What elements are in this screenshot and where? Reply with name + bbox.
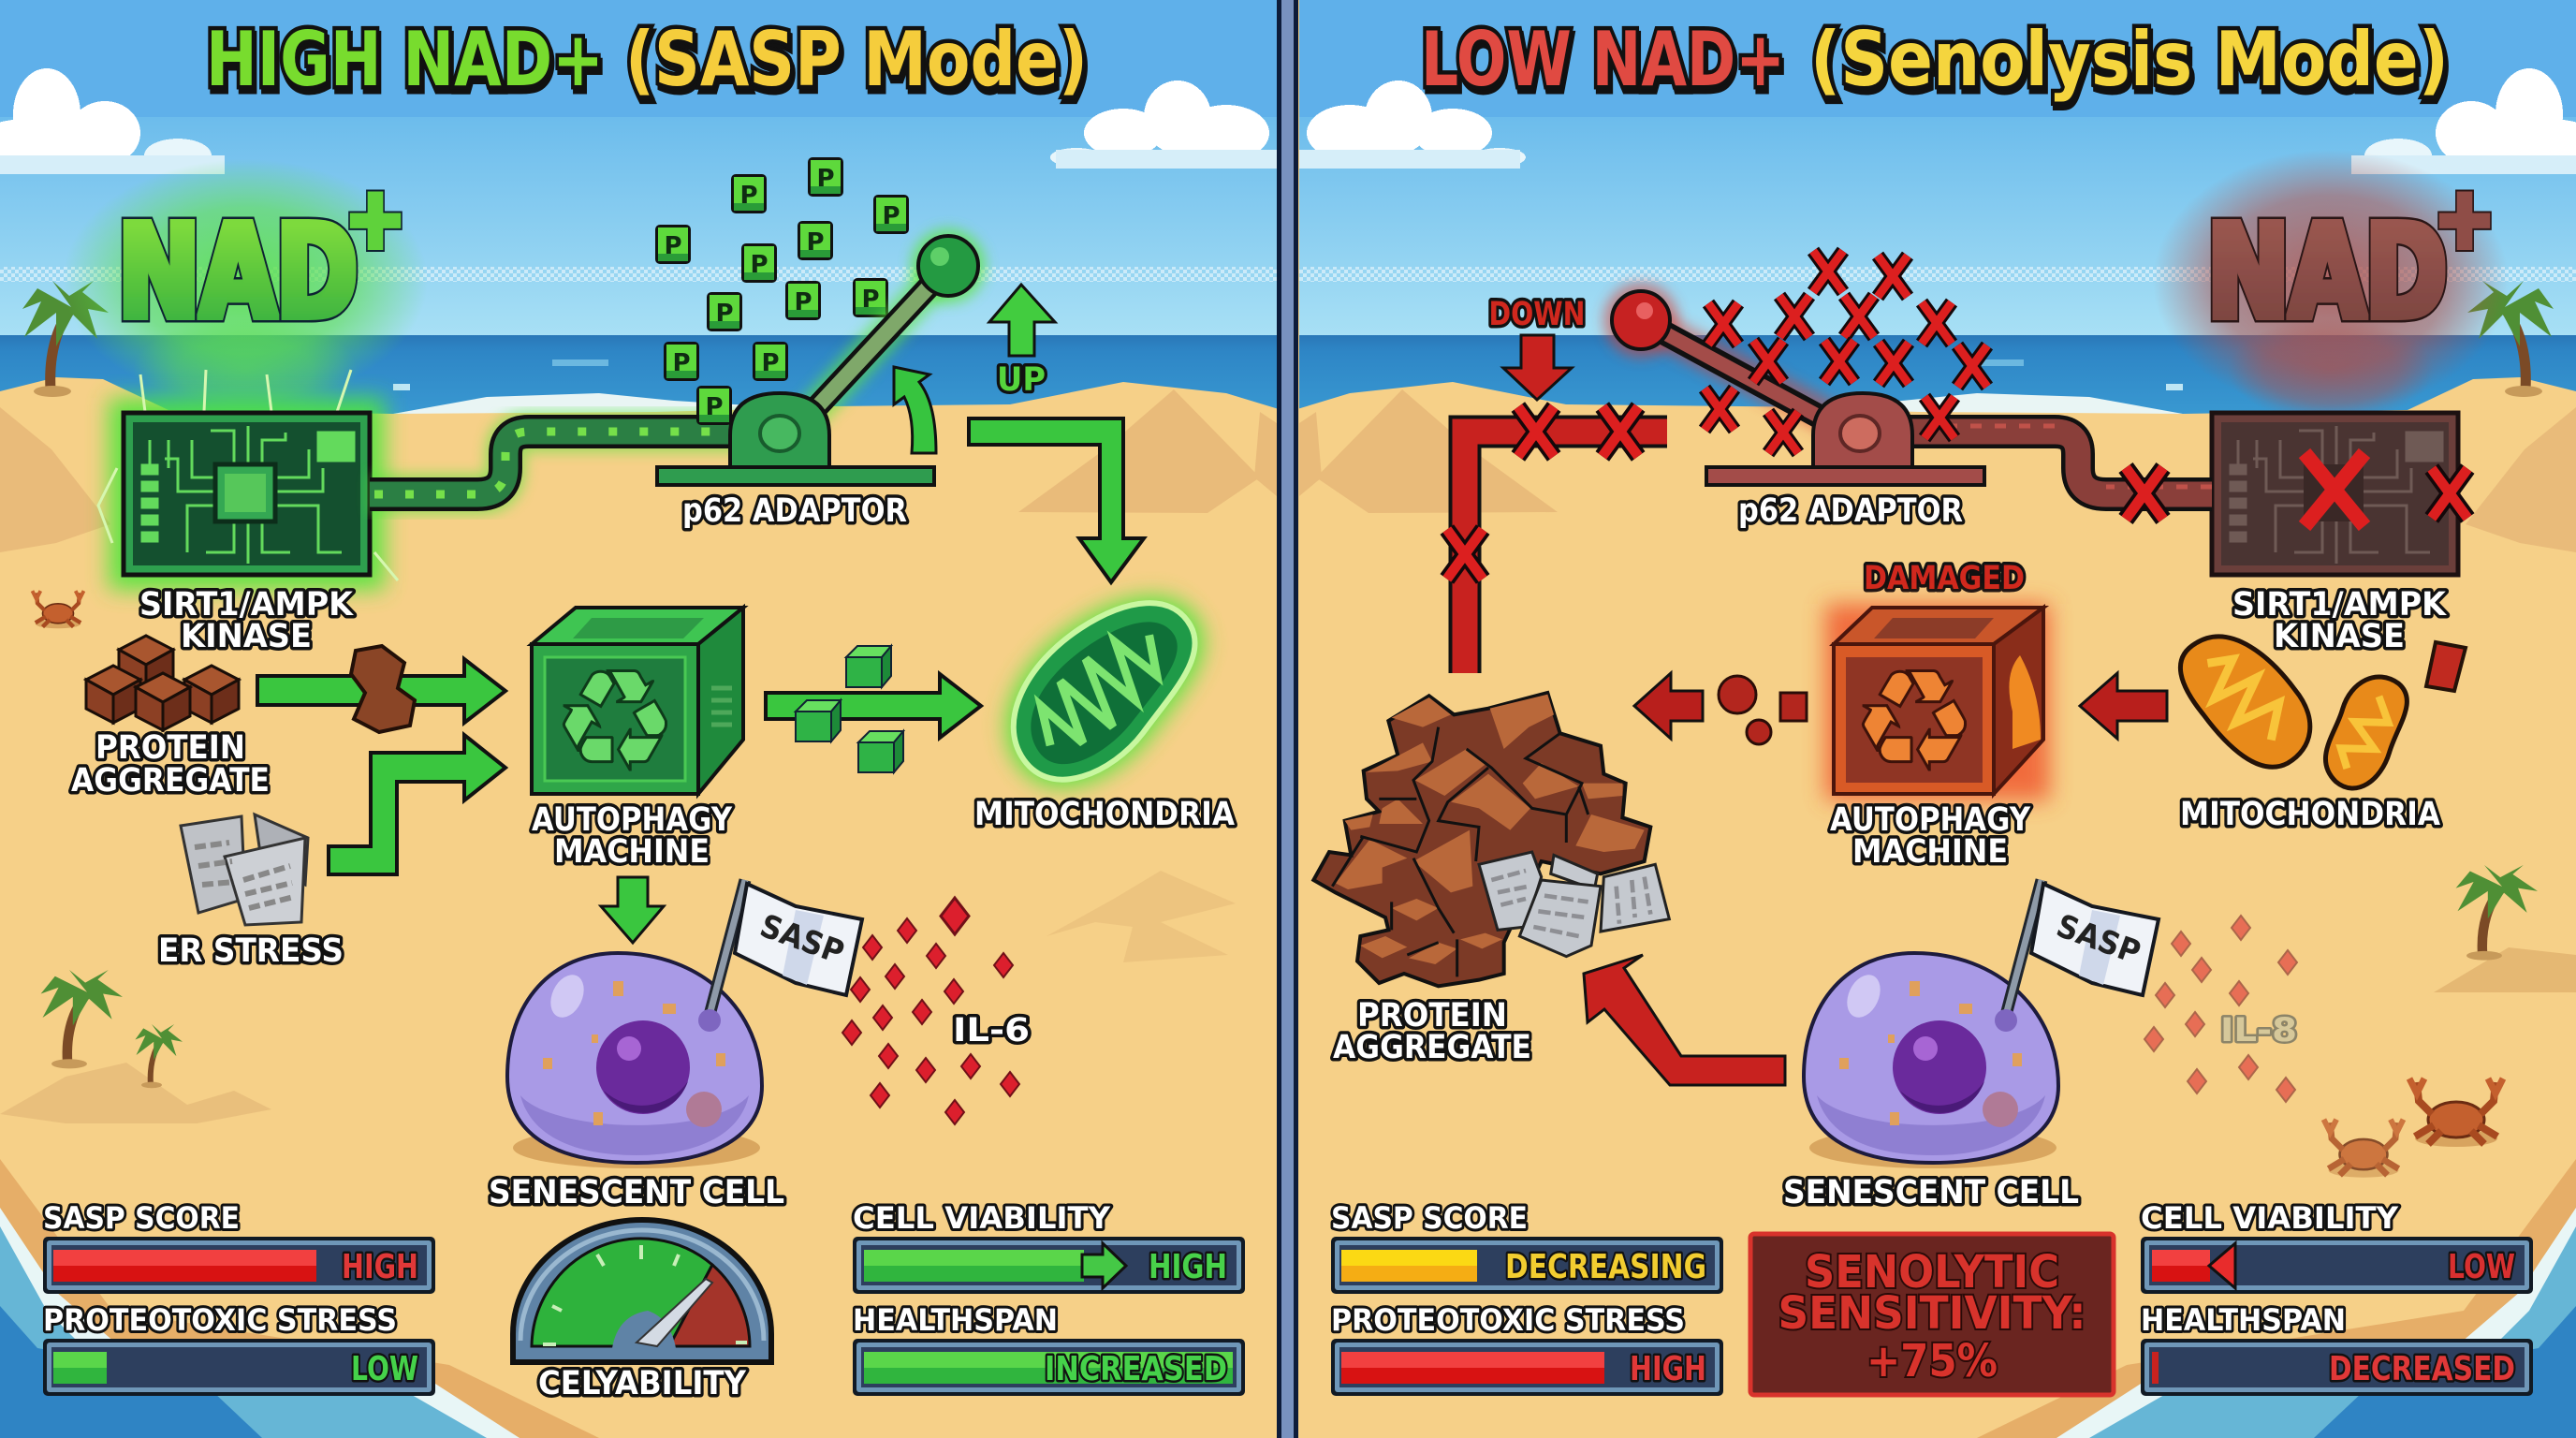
meter: healthspan decreased: HEALTHSPAN (2141, 1302, 2346, 1338)
callout: senolytic sensitivity +75%: SENOLYTIC (1805, 1246, 2059, 1299)
icon: phosphate P chips: P (664, 232, 682, 260)
label: up: UP (997, 361, 1046, 399)
label: p62 adaptor: p62 ADAPTOR (1738, 492, 1963, 530)
arrow: autophagy to mitochondria (766, 674, 981, 738)
icon: p62 lever down (1603, 283, 1984, 485)
NAD+ high glowing label: + (346, 169, 404, 268)
icon: protein aggregate pile with papers (1313, 693, 1669, 986)
meter: proteotoxic stress low: PROTEOTOXIC STRESS (43, 1302, 397, 1338)
meter: healthspan decreased: DECREASED (2329, 1350, 2515, 1388)
meter: proteotoxic stress high: HIGH (1630, 1350, 1706, 1388)
NAD+ high glowing label (63, 159, 428, 421)
label: SIRT1/AMPK kinase (2232, 586, 2448, 655)
icon: phosphate P chips: P (882, 202, 900, 230)
meter: SASP score decreasing (1331, 1200, 1723, 1294)
label: autophagy machine (1830, 801, 2031, 871)
title: high NAD+ (SASP mode): HIGH NAD+ (206, 16, 604, 103)
title: low NAD+ (senolysis mode): LOW NAD+ (1421, 16, 1785, 103)
NAD+ low dim label: + (2436, 169, 2494, 268)
label: autophagy machine: AUTOPHAGY (532, 801, 733, 839)
label: damaged: DAMAGED (1864, 560, 2025, 597)
label: cell viability gauge: CELYABILITY (538, 1365, 747, 1402)
label: protein aggregate (71, 729, 270, 800)
label: IL-6: IL-6 (953, 1012, 1030, 1049)
icon: damaged autophagy machine: ♻ (1852, 640, 1977, 803)
icon: phosphate P chips: P (705, 393, 724, 421)
icon: protein aggregate cubes (86, 636, 239, 730)
NAD+ low dim label: NAD (2207, 197, 2447, 349)
label: IL-8 faded: IL-8 (2220, 1012, 2297, 1049)
icon: phosphate P chips: P (794, 288, 812, 316)
callout: senolytic sensitivity +75% (1750, 1234, 2114, 1395)
label: SIRT1/AMPK kinase: SIRT1/AMPK (2232, 586, 2448, 624)
label: SIRT1/AMPK kinase (139, 586, 355, 655)
icon: phosphate P chips: P (672, 349, 691, 377)
icon: damaged autophagy machine (1825, 604, 2050, 803)
label: SASP flag text: SASP (755, 907, 849, 972)
icon: blocked X marks (1447, 251, 2467, 579)
label: mitochondria: MITOCHONDRIA (974, 796, 1235, 833)
title: high NAD+ (SASP mode): (SASP Mode) (625, 16, 1088, 103)
arrow: mitochondria to machine (2080, 673, 2167, 739)
arrow: up (989, 285, 1055, 356)
meter: SASP score decreasing: SASP SCORE (1331, 1200, 1528, 1236)
icon: senescent cell with SASP flag (507, 880, 862, 1168)
arrow: ER stress to autophagy (329, 735, 505, 874)
label: down: DOWN (1488, 296, 1586, 333)
label: autophagy machine: MACHINE (554, 833, 710, 871)
meter: cell viability low: CELL VIABILITY (2141, 1200, 2399, 1236)
icon: healthy mitochondria (971, 565, 1241, 813)
meter: SASP score high: SASP SCORE (43, 1200, 240, 1236)
NAD+ low dim label (2153, 150, 2509, 421)
icon: IL-6 secreted diamonds (842, 898, 1019, 1124)
title: high NAD+ (SASP mode) (206, 16, 1088, 103)
meter: SASP score high (43, 1200, 435, 1294)
meter: healthspan increased (853, 1302, 1245, 1396)
icon: crab small (32, 591, 84, 628)
gauge: cell viability (513, 1220, 771, 1362)
arrow: lever to mitochondria (969, 418, 1144, 582)
callout: senolytic sensitivity +75%: +75% (1866, 1335, 1998, 1387)
label: autophagy machine: MACHINE (1852, 833, 2008, 871)
icon: ER stress papers (181, 814, 308, 925)
meter: proteotoxic stress high (1331, 1302, 1723, 1396)
label: mitochondria: MITOCHONDRIA (2180, 796, 2440, 833)
label: protein aggregate (1333, 997, 1531, 1066)
meter: healthspan decreased (2141, 1302, 2533, 1396)
label: p62 adaptor: p62 ADAPTOR (682, 492, 907, 530)
pipe: inactive kinase to lever (1900, 426, 2212, 494)
icon: IL-8 faded diamonds (2144, 916, 2297, 1102)
icon: senescent cell with SASP flag (1804, 880, 2159, 1168)
icon: phosphate P chips: P (816, 165, 835, 193)
meter: proteotoxic stress low (43, 1302, 435, 1396)
background: low NAD beach (1288, 0, 2576, 1438)
label: SASP flag text: SASP (2052, 907, 2145, 972)
meter: cell viability high: CELL VIABILITY (853, 1200, 1111, 1236)
arrow: protein to autophagy (257, 659, 505, 723)
red pathway pipe (1465, 432, 1667, 673)
meter: proteotoxic stress high: PROTEOTOXIC STRESS (1331, 1302, 1685, 1338)
label: SIRT1/AMPK kinase: KINASE (181, 618, 312, 655)
meter: healthspan increased: INCREASED (1045, 1350, 1227, 1388)
red pathway pipe fill (1465, 432, 1667, 673)
icon: phosphate P chips: P (806, 228, 825, 257)
beach scenery: palms and dunes (0, 871, 1236, 1123)
title: low NAD+ (senolysis mode): (Senolysis Mode) (1810, 16, 2449, 103)
icon: phosphate P chips: P (750, 251, 768, 279)
icon: phosphate P chips: P (715, 300, 734, 328)
label: senescent cell: SENESCENT CELL (489, 1174, 784, 1211)
arrow: lever curved up (894, 367, 936, 453)
label: protein aggregate: PROTEIN (1357, 997, 1507, 1034)
label: SIRT1/AMPK kinase: KINASE (2274, 618, 2405, 655)
meter: cell viability high (853, 1200, 1245, 1294)
background: high NAD beach (0, 0, 1288, 1438)
meter: cell viability low (2141, 1200, 2533, 1294)
icon: autophagy machine: ♻ (552, 640, 678, 803)
callout: senolytic sensitivity +75%: SENSITIVITY: (1778, 1287, 2086, 1340)
label: SIRT1/AMPK kinase: SIRT1/AMPK (139, 586, 355, 624)
icon: damaged mitochondria (2161, 614, 2466, 799)
arrow: autophagy to cell (601, 877, 664, 943)
label: autophagy machine (532, 801, 733, 871)
label: protein aggregate: PROTEIN (95, 729, 245, 767)
panel: low NAD+ senolysis mode (1313, 16, 2576, 1396)
icon: phosphate P chips: P (761, 349, 780, 377)
icon: SIRT1/AMPK inactive chip (2212, 413, 2458, 575)
icon: protein clump on arrow (351, 646, 415, 732)
meter: cell viability low: LOW (2448, 1248, 2515, 1286)
icon: green cargo cubes (796, 646, 903, 772)
meter: healthspan increased: HEALTHSPAN (853, 1302, 1058, 1338)
label: protein aggregate: AGGREGATE (1333, 1029, 1531, 1066)
label: autophagy machine: AUTOPHAGY (1830, 801, 2031, 839)
meter: SASP score high: HIGH (342, 1248, 418, 1286)
icon: p62 lever up (657, 228, 986, 485)
arrow: cell to aggregate (1584, 955, 1785, 1085)
pipe: kinase to lever (370, 432, 739, 494)
NAD+ high glowing label: NAD (118, 197, 358, 349)
panel: high NAD+ SASP mode (0, 16, 1245, 1402)
icon: phosphate P chips: P (739, 182, 758, 210)
icon: SIRT1/AMPK kinase chip (98, 370, 398, 590)
meter: cell viability high: HIGH (1149, 1248, 1227, 1286)
icon: phosphate P chips: P (861, 286, 880, 314)
arrow: machine to aggregate (1634, 673, 1703, 739)
icon: beach palm (2434, 865, 2576, 992)
meter: SASP score decreasing: DECREASING (1505, 1248, 1706, 1286)
label: ER stress: ER STRESS (158, 932, 344, 970)
icon: phosphate P chips (655, 157, 909, 425)
label: senescent cell: SENESCENT CELL (1783, 1174, 2079, 1211)
panel divider (1277, 0, 1298, 1438)
icon: crabs (2323, 1078, 2503, 1178)
title: low NAD+ (senolysis mode) (1421, 16, 2449, 103)
arrow: down (1503, 335, 1572, 400)
icon: debris (1719, 676, 1807, 744)
icon: autophagy machine (532, 608, 743, 803)
meter: proteotoxic stress low: LOW (351, 1350, 418, 1388)
label: protein aggregate: AGGREGATE (71, 762, 270, 800)
